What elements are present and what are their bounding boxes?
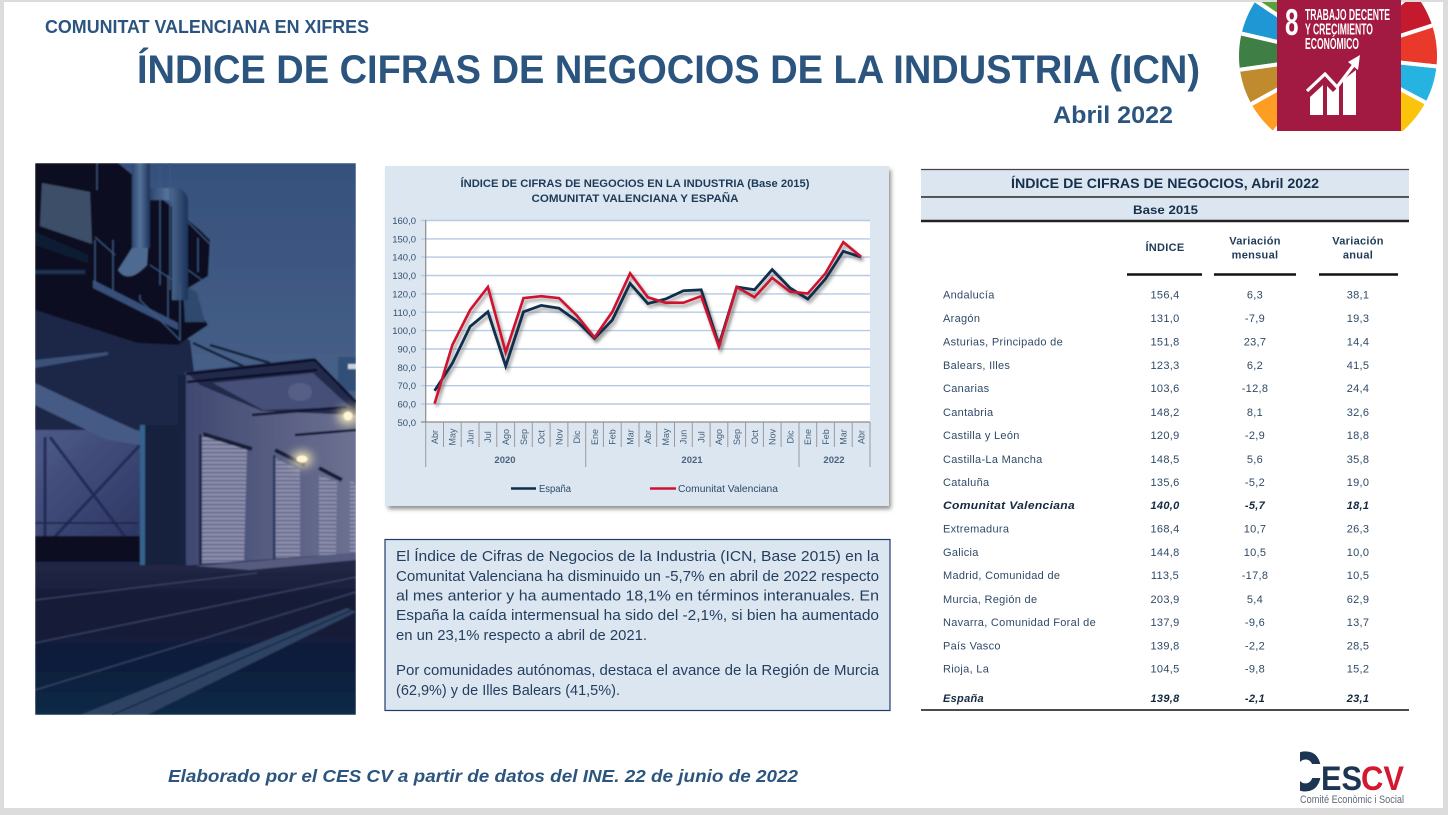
y axis labels: 150,0 — [392, 234, 416, 245]
column headers: mensual — [1232, 250, 1278, 262]
table rows: 10,5 — [1347, 570, 1369, 582]
chart title: ÍNDICE DE CIFRAS DE NEGOCIOS EN LA INDUSTRIA (Base 2015) — [460, 177, 810, 190]
table rows: 140,0 — [1150, 500, 1180, 512]
plot area — [426, 220, 870, 422]
table rows: Cataluña — [943, 477, 990, 489]
column headers: Variación — [1332, 236, 1384, 248]
table rows: Madrid, Comunidad de — [943, 570, 1060, 582]
logo: CES CV: Comité Econòmic i Social — [1300, 794, 1404, 806]
table rows: Aragón — [943, 313, 980, 325]
logo: CES CV — [1300, 751, 1404, 803]
y axis labels: 130,0 — [392, 271, 416, 282]
table rows: Balears, Illes — [943, 360, 1010, 372]
table rows: 5,4 — [1247, 594, 1263, 606]
table rows: -17,8 — [1242, 570, 1268, 582]
y axis labels: 110,0 — [393, 308, 416, 319]
table rows: 156,4 — [1150, 290, 1180, 302]
table rows: 123,3 — [1150, 360, 1180, 372]
table rows: 103,6 — [1150, 383, 1180, 395]
month labels: Jun — [679, 430, 689, 444]
table rows: Galicia — [943, 547, 979, 559]
table rows: 32,6 — [1347, 407, 1369, 419]
table rows: -2,9 — [1245, 430, 1265, 442]
table rows: 13,7 — [1347, 617, 1369, 629]
icon: SDG 8 badge: 8 — [1285, 2, 1298, 43]
panel: data table — [921, 169, 1409, 710]
table rows: -7,9 — [1245, 313, 1265, 325]
year labels: 2021 — [681, 455, 703, 466]
header label: COMUNITAT VALENCIANA EN XIFRES — [45, 17, 369, 37]
table rows: 148,5 — [1150, 454, 1180, 466]
table rows: -5,7 — [1245, 500, 1266, 512]
y axis labels: 70,0 — [398, 381, 416, 392]
table rows: Castilla y León — [943, 430, 1020, 442]
table rows: 148,2 — [1150, 407, 1180, 419]
table rows: 137,9 — [1150, 617, 1180, 629]
chart title: COMUNITAT VALENCIANA Y ESPAÑA — [532, 192, 738, 205]
table rows: 15,2 — [1347, 664, 1369, 676]
month labels: Nov — [768, 429, 778, 445]
title: ÍNDICE DE CIFRAS DE NEGOCIOS DE LA INDUSTRIA (ICN) — [137, 48, 1200, 92]
month labels: Jul — [483, 431, 493, 443]
line: España — [435, 251, 861, 391]
table rows: 23,7 — [1244, 336, 1266, 348]
table rows: Murcia, Región de — [943, 594, 1037, 606]
table rows: Asturias, Principado de — [943, 336, 1063, 348]
table rows: 10,5 — [1244, 547, 1266, 559]
y axis labels — [392, 216, 416, 429]
month labels: Nov — [554, 429, 564, 445]
table rows: 28,5 — [1347, 640, 1369, 652]
table subtitle: Base 2015 — [1133, 203, 1198, 217]
month labels: Ene — [803, 429, 813, 445]
y axis labels: 60,0 — [398, 400, 416, 410]
y axis labels: 160,0 — [392, 216, 416, 227]
table rows: 26,3 — [1347, 524, 1369, 536]
text block: commentary: Comunitat Valenciana ha disminuido un -5,7% en abril de 2022 respecto — [396, 568, 879, 585]
table rows: 113,5 — [1151, 570, 1179, 582]
table rows: -2,1 — [1245, 693, 1265, 705]
table rows: 19,3 — [1347, 313, 1369, 325]
icon: SDG 8 badge: ECONÓMICO — [1305, 34, 1359, 53]
table rows: 6,2 — [1247, 360, 1263, 372]
month labels: Dic — [572, 430, 582, 444]
table rows: 139,8 — [1150, 693, 1180, 705]
table rows: España — [943, 693, 984, 705]
y axis labels: 80,0 — [398, 363, 416, 374]
table rows: Extremadura — [943, 524, 1010, 536]
month labels: May — [448, 428, 458, 446]
table rows: -12,8 — [1242, 383, 1268, 395]
month labels: Dic — [785, 430, 795, 444]
line shadows — [437, 245, 863, 407]
table rows: 168,4 — [1150, 524, 1180, 536]
table rows: 18,1 — [1347, 500, 1369, 512]
legend — [511, 484, 778, 495]
table rows: Comunitat Valenciana — [943, 500, 1075, 512]
table rows — [943, 290, 1369, 705]
legend: Comunitat Valenciana — [678, 484, 778, 495]
table rows: 135,6 — [1150, 477, 1180, 489]
column headers — [1145, 236, 1384, 262]
line: Comunitat Valenciana — [435, 242, 861, 404]
year labels — [494, 455, 845, 466]
logo: CES CV: C — [1291, 743, 1322, 802]
month labels — [430, 428, 866, 446]
month labels: Abr — [430, 430, 440, 444]
table rows: -9,8 — [1245, 664, 1265, 676]
table rows: -2,2 — [1245, 640, 1265, 652]
month labels: May — [661, 428, 671, 446]
table rows: 62,9 — [1347, 594, 1369, 606]
month labels: Abr — [643, 430, 653, 444]
table rows: 10,0 — [1347, 547, 1369, 559]
table rows: 120,9 — [1150, 430, 1180, 442]
month labels: Ene — [590, 429, 600, 445]
logo: CES CV: ES — [1321, 760, 1362, 798]
table title: ÍNDICE DE CIFRAS DE NEGOCIOS, Abril 2022 — [1011, 176, 1319, 191]
table rows: -5,2 — [1245, 477, 1265, 489]
table rows: 8,1 — [1247, 407, 1263, 419]
column headers: Variación — [1229, 236, 1281, 248]
text block: commentary: Por comunidades autónomas, destaca el avance de la Región de Murcia — [396, 662, 880, 679]
month labels: Feb — [608, 429, 618, 445]
x axis ticks — [426, 422, 870, 467]
icon: SDG 8 badge: Y CRECIMIENTO — [1305, 22, 1373, 38]
table rows: Castilla-La Mancha — [943, 454, 1043, 466]
photo: industrial building at dusk — [35, 160, 358, 715]
table rows: 19,0 — [1347, 477, 1369, 489]
text block: commentary: en un 23,1% respecto a abril de 2021. — [396, 627, 647, 644]
table rows: 151,8 — [1150, 336, 1180, 348]
y axis labels: 120,0 — [392, 289, 416, 300]
month labels: Abr — [856, 430, 866, 444]
table rows: Canarias — [943, 383, 990, 395]
table rows: País Vasco — [943, 640, 1001, 652]
month labels: Oct — [536, 430, 546, 444]
date: Abril 2022 — [1053, 102, 1173, 129]
table rows: 23,1 — [1346, 693, 1369, 705]
table rows: Cantabria — [943, 407, 994, 419]
table rows: 144,8 — [1150, 547, 1180, 559]
table rows: 131,0 — [1150, 313, 1180, 325]
table rows: 104,5 — [1150, 664, 1180, 676]
text block: commentary: El Índice de Cifras de Negocios de la Industria (ICN, Base 2015) en la — [396, 548, 880, 565]
icon: SDG 8 badge — [1239, 0, 1437, 131]
y axis labels: 140,0 — [392, 253, 416, 264]
logo: CES CV: CV — [1361, 760, 1404, 798]
table rows: 6,3 — [1247, 290, 1263, 302]
month labels: Ago — [501, 429, 511, 445]
table rows: 35,8 — [1347, 454, 1369, 466]
table rows: 18,8 — [1347, 430, 1369, 442]
table rows: 139,8 — [1150, 640, 1180, 652]
y axis labels: 50,0 — [398, 418, 416, 429]
y axis labels: 100,0 — [392, 326, 416, 337]
table rows: -9,6 — [1245, 617, 1265, 629]
y axis labels: 90,0 — [398, 344, 416, 356]
month labels: Mar — [625, 429, 635, 445]
table rows: Andalucía — [943, 290, 995, 302]
table rows: 24,4 — [1347, 383, 1369, 395]
month labels: Jul — [696, 431, 706, 443]
text block: commentary: (62,9%) y de Illes Balears (41,5%). — [396, 682, 620, 699]
month labels: Jun — [465, 430, 475, 444]
table rows: 10,7 — [1244, 524, 1266, 536]
month labels: Oct — [750, 430, 760, 444]
month labels: Ago — [714, 429, 724, 445]
year labels: 2022 — [823, 455, 845, 466]
month labels: Sep — [732, 429, 742, 445]
year labels: 2020 — [494, 455, 516, 466]
legend: España — [539, 484, 571, 495]
source footer: Elaborado por el CES CV a partir de datos del INE. 22 de junio de 2022 — [168, 766, 798, 786]
text block: commentary — [385, 540, 890, 710]
month labels: Mar — [839, 429, 849, 445]
column headers: anual — [1343, 250, 1373, 262]
table rows: 5,6 — [1247, 454, 1263, 466]
text block: commentary: al mes anterior y ha aumentado 18,1% en términos interanuales. En — [396, 588, 879, 604]
table rows: 41,5 — [1347, 360, 1369, 372]
text block: commentary: España la caída intermensual ha sido del -2,1%, si bien ha aumentado — [396, 607, 879, 624]
month labels: Feb — [821, 429, 831, 445]
table rows: 38,1 — [1347, 290, 1369, 302]
chart title — [460, 177, 810, 205]
table rows: Navarra, Comunidad Foral de — [943, 617, 1096, 629]
table rows: 14,4 — [1347, 336, 1369, 348]
month labels: Sep — [519, 429, 529, 445]
table rows: Rioja, La — [943, 664, 990, 676]
panel: line chart — [385, 166, 891, 509]
table rows: 203,9 — [1150, 594, 1180, 606]
column headers: ÍNDICE — [1145, 241, 1185, 254]
